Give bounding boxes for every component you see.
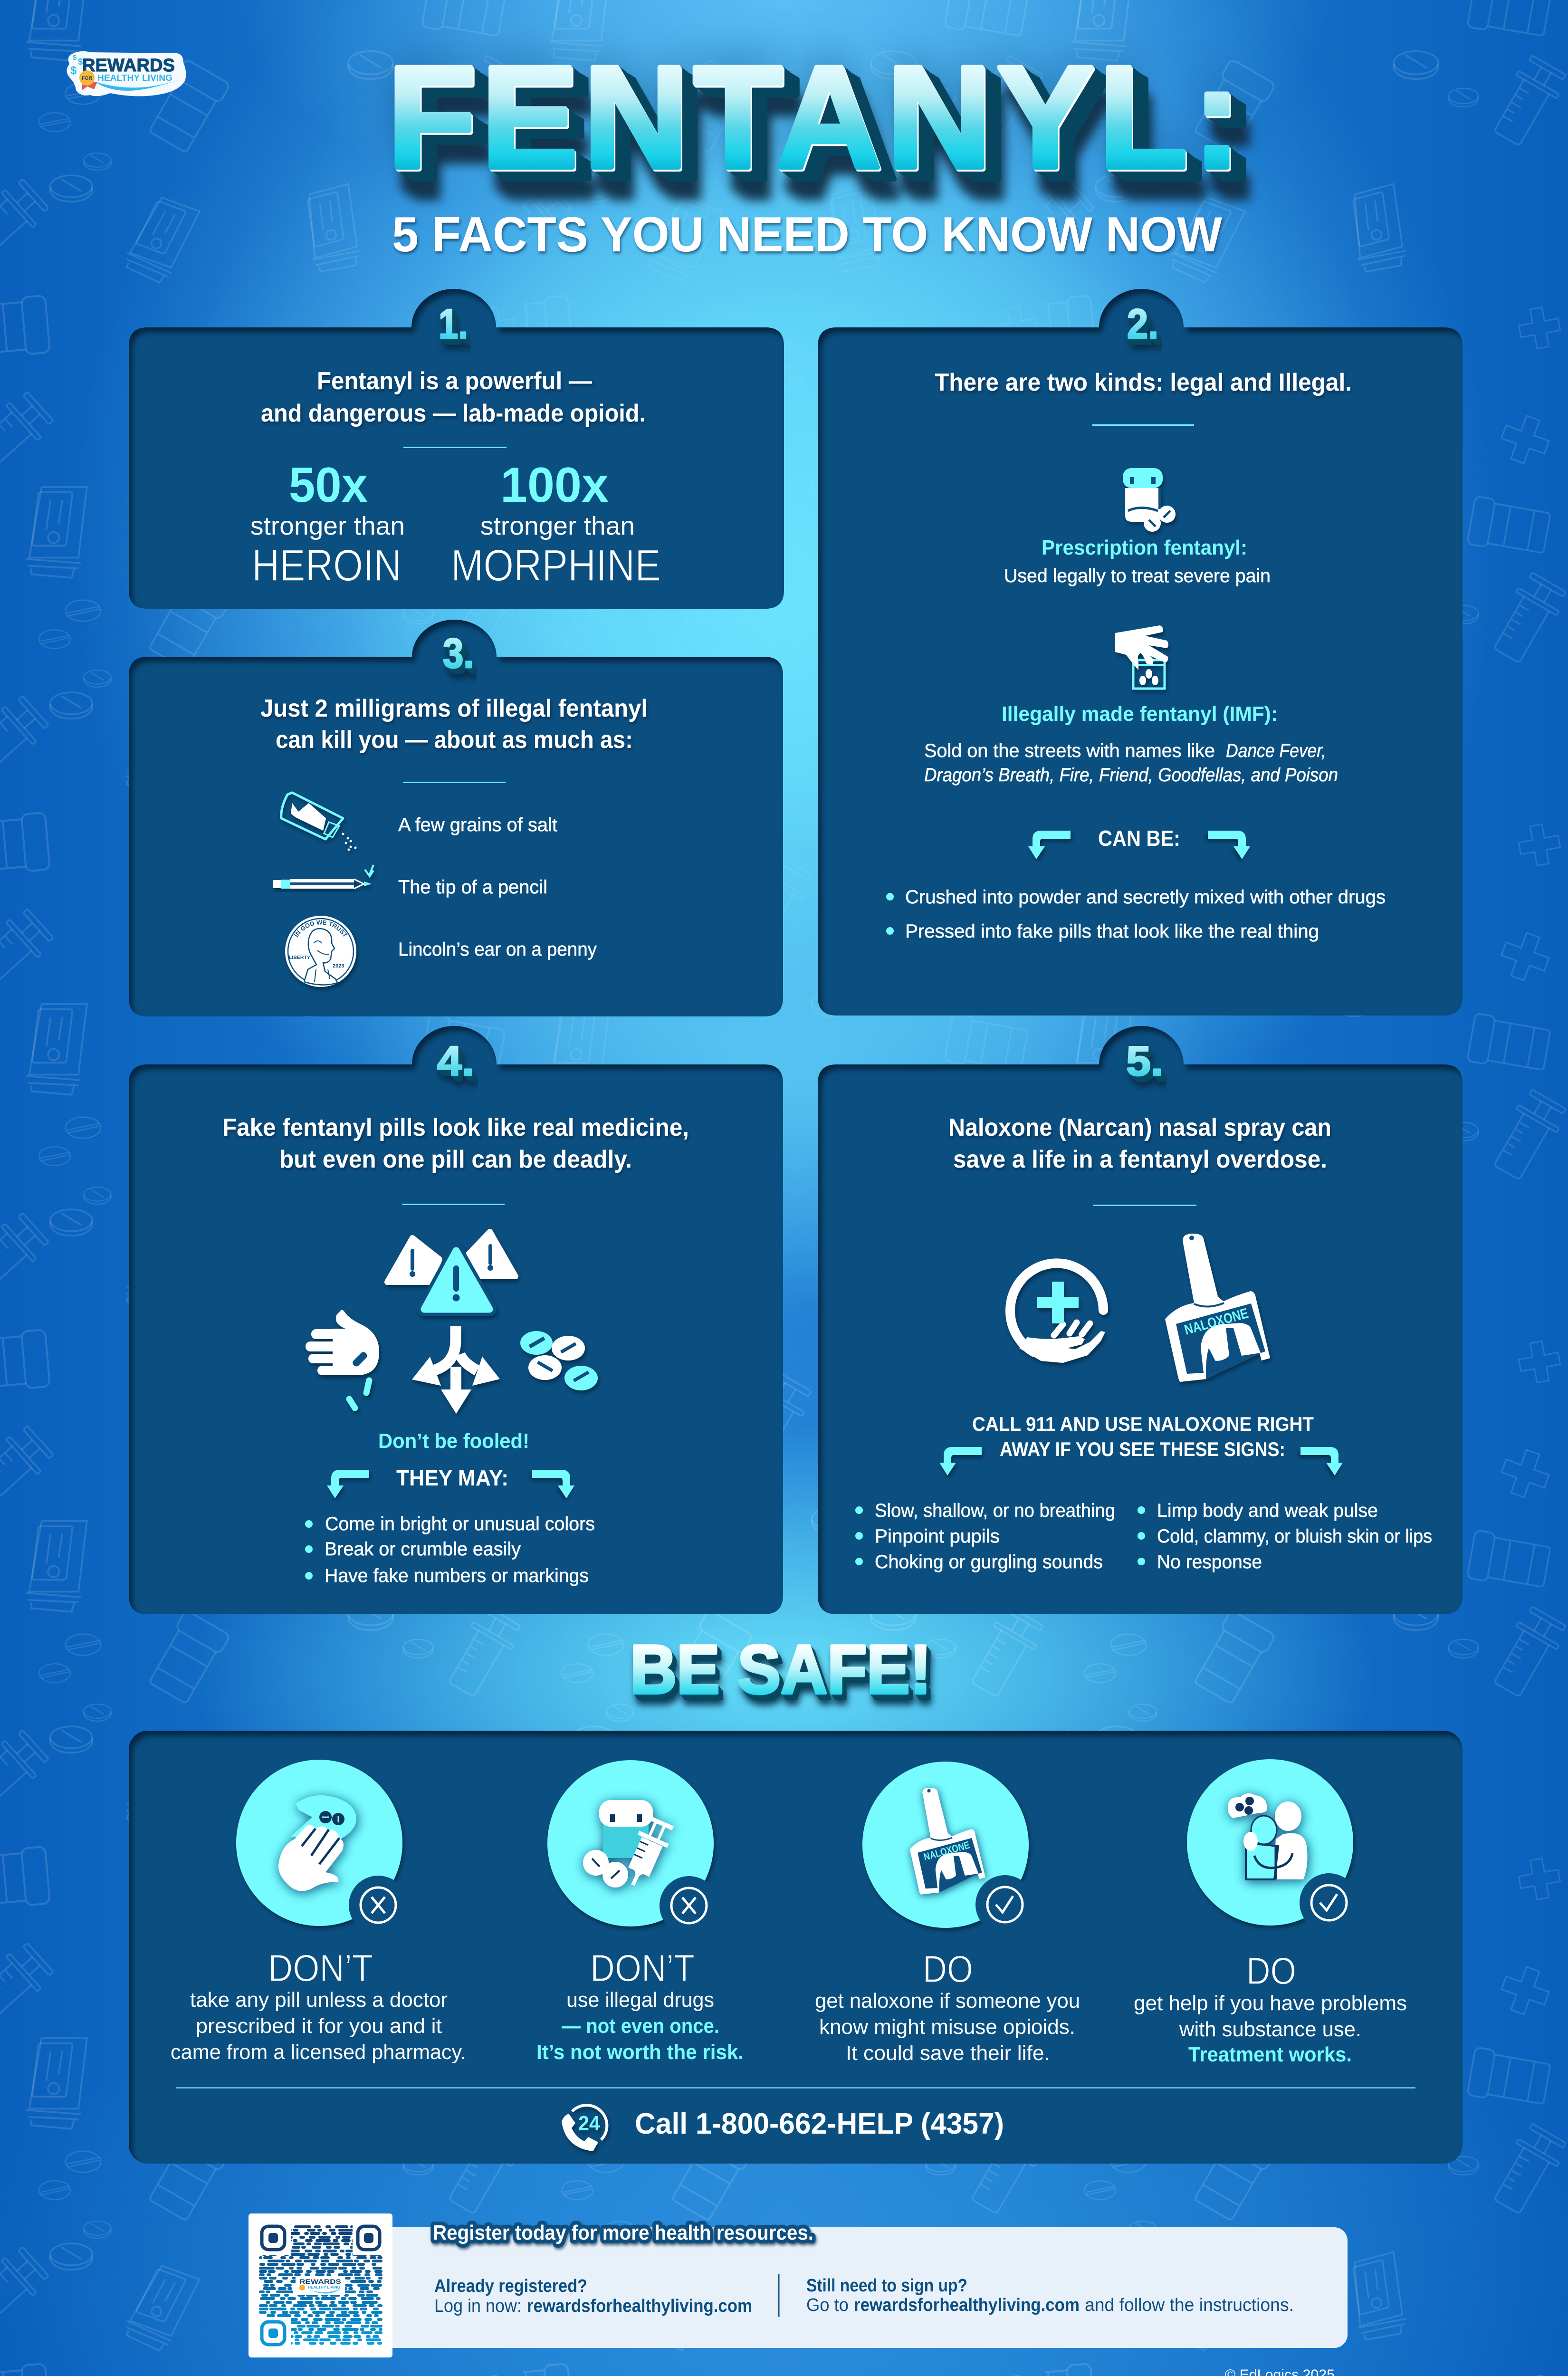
already registered text: Log in now:: [434, 2296, 522, 2316]
logo: Rewards for Healthy Living: $: [73, 54, 77, 62]
can be label with arrows: CAN BE:: [1098, 826, 1180, 851]
bullets: can be: [886, 887, 1386, 942]
QR code: [249, 2213, 392, 2357]
stat: 50x stronger than heroin: HEROIN: [252, 540, 402, 590]
icon: naloxone nasal spray: NALOXONE: [1183, 1305, 1250, 1338]
icon: penny: 2023: [333, 963, 344, 969]
action 1: don't take any pill: prescribed it for you and it: [196, 2014, 442, 2038]
fact number 5: 5.: [1126, 1037, 1163, 1084]
icon: check badge: [1311, 1885, 1347, 1920]
title: FENTANYL: FENTANYL:: [387, 36, 1241, 198]
icon: branching arrows: [412, 1326, 500, 1414]
helpline number: Call 1-800-662-HELP (4357): [635, 2108, 1004, 2140]
callout: call 911 with arrows: CALL 911 AND USE NALOXONE RIGHT: [972, 1413, 1314, 1435]
icon: bottle syringe and pills: [583, 1800, 676, 1892]
register heading: Register today for more health resources.: [433, 2221, 813, 2244]
logo: Rewards for Healthy Living: REWARDS: [82, 56, 175, 76]
bullets: can be: Pressed into fake pills that look like the real thing: [905, 921, 1319, 942]
QR code: HEALTHY LIVING: [308, 2285, 340, 2290]
stat: 100x stronger than morphine: [451, 458, 661, 590]
action 2: don't use illegal drugs: — not even once.: [562, 2014, 719, 2038]
stat: 50x stronger than heroin: stronger than: [250, 512, 405, 540]
icon: penny: IN GOD WE TRUST: [293, 919, 349, 939]
panel: fact 2: [818, 289, 1463, 1016]
fact number 2: 2.: [1127, 300, 1158, 347]
heading: fact 4: [222, 1114, 689, 1173]
still need to sign up text: and follow the instructions.: [1085, 2295, 1294, 2315]
text: illegally made fentanyl: Illegally made fentanyl (IMF):: [1002, 702, 1278, 726]
stat: 100x stronger than morphine: stronger than: [480, 512, 635, 540]
action 4: do get help: get help if you have problems: [1134, 1992, 1407, 2015]
bullets: overdose signs right: No response: [1157, 1552, 1262, 1572]
icon: penny: LIBERTY: [289, 955, 310, 960]
already registered text: rewardsforhealthyliving.com: [527, 2296, 752, 2316]
action 3: do get naloxone: [815, 1762, 1080, 2065]
text: prescription fentanyl: Used legally to treat severe pain: [1004, 565, 1271, 586]
logo: Rewards for Healthy Living: $: [70, 64, 77, 77]
panel: fact 5: [818, 1026, 1463, 1614]
bullets: they may: Break or crumble easily: [325, 1539, 521, 1560]
still need to sign up text: Go to: [806, 2295, 849, 2315]
action 1: don't take any pill: [171, 1760, 466, 2064]
action 1: don't take any pill: DON’T: [268, 1947, 373, 1989]
label: they may with arrows: [327, 1466, 574, 1498]
bullets: overdose signs right: [1138, 1500, 1432, 1572]
bullets: overdose signs right: Limp body and weak pulse: [1157, 1500, 1378, 1521]
bullets: they may: [305, 1514, 595, 1586]
stat: 100x stronger than morphine: 100x: [500, 458, 609, 513]
fact number 4: 4.: [437, 1037, 474, 1084]
text: illegally made fentanyl: [924, 702, 1338, 786]
icon: naloxone spray: [910, 1788, 985, 1895]
icon: naloxone spray: NALOXONE: [922, 1839, 971, 1863]
callout: call 911 with arrows: AWAY IF YOU SEE THESE SIGNS:: [1000, 1438, 1285, 1460]
icon: hand taking pills: [278, 1795, 356, 1891]
icon: 24 hour phone: [562, 2105, 607, 2151]
text: penny: Lincoln’s ear on a penny: [398, 939, 597, 960]
icon: pencil: [273, 865, 373, 889]
panel: fact 1: [129, 289, 784, 609]
logo: Rewards for Healthy Living: FOR: [82, 76, 92, 81]
callout: call 911 with arrows: [939, 1413, 1343, 1475]
bullets: they may: Come in bright or unusual colors: [325, 1514, 595, 1534]
action 4: do get help: DO: [1246, 1950, 1296, 1992]
action 4: do get help: with substance use.: [1179, 2018, 1361, 2041]
action 2: don't use illegal drugs: [536, 1760, 744, 2064]
action 3: do get naloxone: know might misuse opioids.: [819, 2015, 1075, 2039]
icon: person comforting person, pills thought cloud: [1228, 1793, 1307, 1879]
still need to sign up text: Still need to sign up?: [806, 2276, 967, 2296]
action 3: do get naloxone: It could save their life.: [846, 2041, 1050, 2065]
text: prescription fentanyl: Prescription fentanyl:: [1042, 536, 1247, 559]
heading: fact 4: Fake fentanyl pills look like real medicine,: [222, 1114, 689, 1141]
icon: hand with medical cross: [1010, 1263, 1105, 1363]
action 2: don't use illegal drugs: It’s not worth the risk.: [536, 2041, 744, 2064]
action 3: do get naloxone: get naloxone if someone you: [815, 1989, 1080, 2012]
heading: fact 1: and dangerous — lab-made opioid.: [261, 400, 646, 427]
icon: hand dropping pills: [306, 1310, 379, 1408]
subtitle: 5 FACTS YOU NEED TO KNOW NOW: [392, 207, 1223, 262]
icon: x badge: [671, 1888, 707, 1923]
logo: Rewards for Healthy Living: HEALTHY LIVING: [97, 73, 172, 83]
panel: be safe actions: [129, 1731, 1463, 2164]
text: prescription fentanyl: [1004, 536, 1271, 586]
bullets: they may: Have fake numbers or markings: [325, 1565, 589, 1586]
icon: x badge: [361, 1887, 396, 1923]
icon: salt shaker: [281, 793, 356, 851]
action 4: do get help: [1134, 1759, 1407, 2066]
action 1: don't take any pill: came from a licensed pharmacy.: [171, 2041, 466, 2064]
icon: 24 hour phone: 24: [578, 2112, 600, 2135]
QR code: REWARDS: [299, 2278, 341, 2285]
still need to sign up text: [806, 2276, 1294, 2315]
heading: fact 4: but even one pill can be deadly.: [279, 1146, 632, 1173]
fact number 1: 1.: [439, 300, 468, 347]
action 1: don't take any pill: take any pill unless a doctor: [190, 1988, 448, 2012]
heading: fact 2: There are two kinds: legal and Illegal.: [935, 369, 1352, 396]
text: illegally made fentanyl: Dragon’s Breath, Fire, Friend, Goodfellas, and Poison: [924, 765, 1338, 786]
panel: fact 4: [129, 1026, 783, 1614]
icon: check badge: [987, 1887, 1023, 1922]
bullets: overdose signs left: [855, 1500, 1115, 1572]
icon: penny: [285, 916, 356, 987]
stat: 50x stronger than heroin: 50x: [289, 458, 368, 513]
bullets: overdose signs left: Pinpoint pupils: [875, 1526, 1000, 1547]
icon: warning triangles: [387, 1232, 516, 1309]
heading: fact 3: [260, 695, 648, 754]
heading: fact 1: [261, 367, 646, 427]
bullets: overdose signs right: Cold, clammy, or bluish skin or lips: [1157, 1526, 1432, 1547]
bullets: overdose signs left: Slow, shallow, or no breathing: [875, 1500, 1115, 1521]
heading: fact 5: [948, 1114, 1331, 1173]
heading: be safe: BE SAFE!: [630, 1631, 931, 1708]
still need to sign up text: rewardsforhealthyliving.com: [854, 2295, 1080, 2315]
icon: prescription bottle: [1123, 468, 1176, 532]
action 2: don't use illegal drugs: DON’T: [590, 1947, 695, 1989]
icon: hand with bag of pills: [1115, 625, 1168, 689]
heading: fact 5: save a life in a fentanyl overdose.: [953, 1146, 1327, 1173]
text: pencil: The tip of a pencil: [398, 877, 547, 898]
logo: Rewards for Healthy Living: [67, 51, 186, 96]
panel: fact 3: [129, 620, 783, 1016]
heading: fact 1: Fentanyl is a powerful —: [317, 367, 592, 395]
heading: fact 5: Naloxone (Narcan) nasal spray can: [948, 1114, 1331, 1141]
action 3: do get naloxone: DO: [923, 1948, 973, 1990]
action 2: don't use illegal drugs: use illegal drugs: [566, 1988, 714, 2012]
text: illegally made fentanyl: Dance Fever,: [1226, 740, 1326, 761]
text: illegally made fentanyl: Sold on the streets with names like: [924, 740, 1215, 761]
stat: 100x stronger than morphine: MORPHINE: [451, 540, 661, 590]
icon: naloxone nasal spray: [1165, 1234, 1270, 1382]
text: salt: A few grains of salt: [398, 814, 557, 835]
stat: 50x stronger than heroin: [250, 458, 405, 590]
fact number 3: 3.: [443, 630, 474, 677]
register panel: [371, 2221, 1348, 2348]
bullets: overdose signs left: Choking or gurgling sounds: [875, 1552, 1103, 1572]
label: they may with arrows: THEY MAY:: [396, 1466, 508, 1490]
action 4: do get help: Treatment works.: [1188, 2043, 1352, 2066]
logo: Rewards for Healthy Living: $: [78, 57, 83, 67]
already registered text: [434, 2276, 752, 2316]
text: don't be fooled: Don’t be fooled!: [378, 1429, 529, 1453]
icon: fake pills: [520, 1331, 598, 1390]
heading: fact 3: can kill you — about as much as:: [276, 726, 633, 754]
bullets: can be: Crushed into powder and secretly mixed with other drugs: [905, 887, 1386, 908]
heading: fact 3: Just 2 milligrams of illegal fentanyl: [260, 695, 648, 722]
can be label with arrows: [1028, 826, 1250, 859]
already registered text: Already registered?: [434, 2276, 587, 2296]
